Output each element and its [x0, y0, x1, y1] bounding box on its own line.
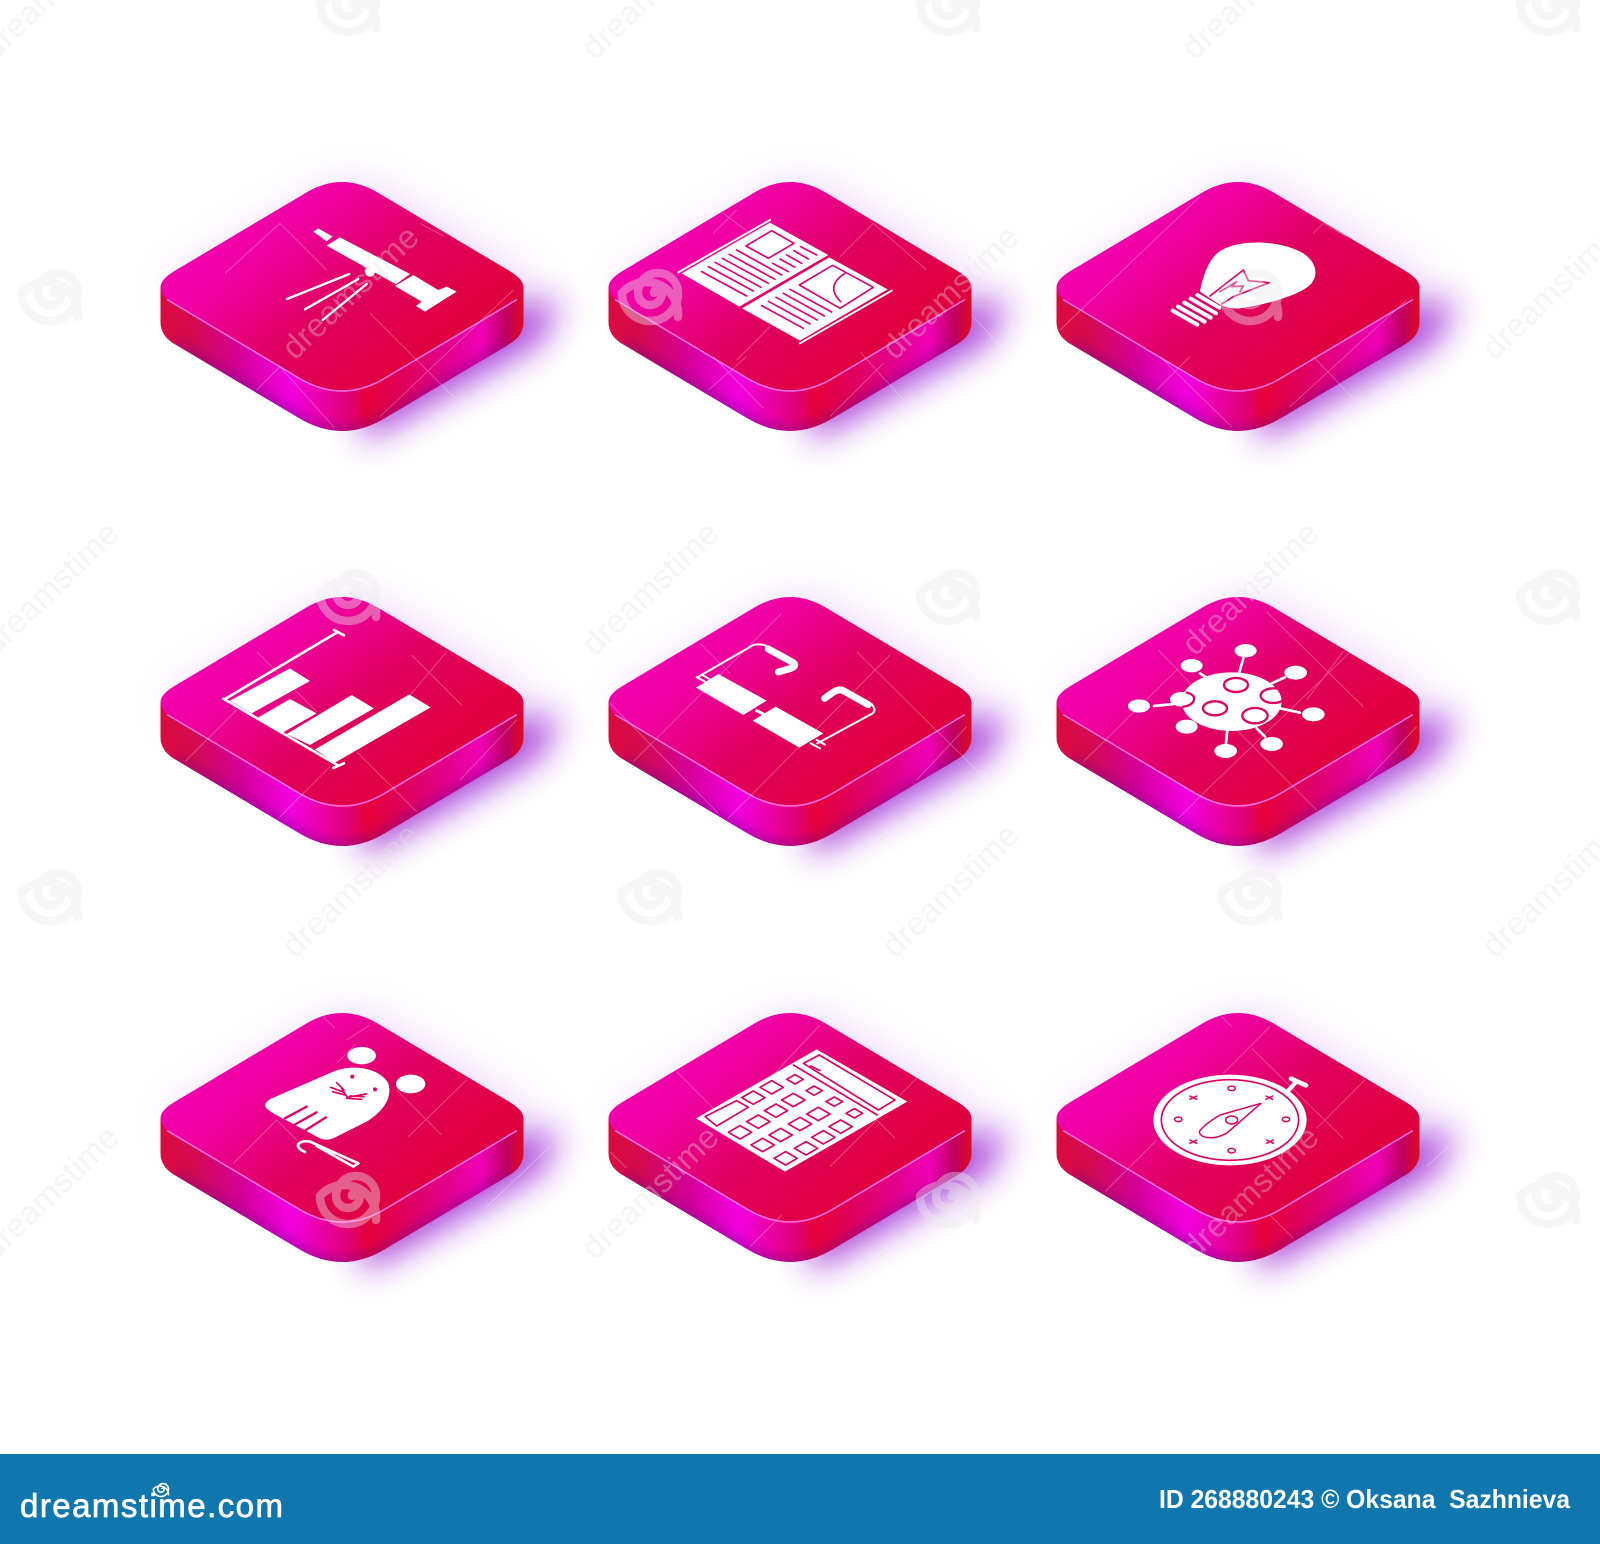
panel: compass tile: [1056, 1013, 1458, 1273]
watermark: dreamstime diagonal text: dreamstime: [1174, 514, 1326, 662]
panel: glasses tile: [608, 597, 1010, 857]
icon: telescope: [225, 223, 513, 428]
footer bar: [0, 1454, 1600, 1544]
icon: calculator: [610, 1025, 917, 1247]
tile base: compass: [1056, 1013, 1458, 1273]
icon: footer logo spiral: [153, 1484, 169, 1497]
footer logo text: dreamstime.com: [20, 1487, 283, 1524]
panel: virus tile: [1056, 597, 1458, 857]
icon: mouse: [233, 1017, 550, 1207]
watermark: dreamstime diagonal text: dreamstime: [874, 218, 1026, 366]
tile base: glasses: [608, 597, 1010, 857]
icon: bar chart: [185, 630, 517, 817]
tile base: mouse: [160, 1013, 562, 1273]
icon: newspaper: [678, 210, 1010, 417]
icon: virus: [1083, 612, 1417, 818]
tile base: light bulb: [1056, 182, 1458, 442]
panel: mouse tile: [160, 1013, 562, 1273]
icon: light bulb: [1060, 197, 1407, 427]
watermark: dreamstime diagonal text: dreamstime: [1174, 1118, 1326, 1266]
tile base: newspaper: [608, 182, 1010, 442]
watermark: dreamstime diagonal text: dreamstime: [874, 816, 1026, 964]
watermark: spirals: [22, 0, 1576, 1224]
panel: calculator tile: [608, 1013, 1010, 1273]
tile base: bar chart: [160, 597, 562, 857]
panel: telescope tile: [160, 182, 562, 442]
watermark: dreamstime diagonal text: dreamstime: [274, 816, 426, 964]
panel: bar chart tile: [160, 597, 562, 857]
panel: newspaper tile: [608, 182, 1010, 442]
watermark: dreamstime diagonal text: dreamstime: [574, 1118, 726, 1266]
icon: glasses: [610, 613, 980, 818]
footer credit text: ID 268880243 © Oksana Sazhnieva: [1159, 1484, 1571, 1514]
tile base: virus: [1056, 597, 1458, 857]
watermark: dreamstime diagonal text: dreamstime: [574, 514, 726, 662]
tile base: telescope: [160, 182, 562, 442]
icon: compass stopwatch: [1105, 1017, 1448, 1238]
panel: light bulb tile: [1056, 182, 1458, 442]
tile base: calculator: [608, 1013, 1010, 1273]
watermark: dreamstime diagonal text: dreamstime: [274, 218, 426, 366]
